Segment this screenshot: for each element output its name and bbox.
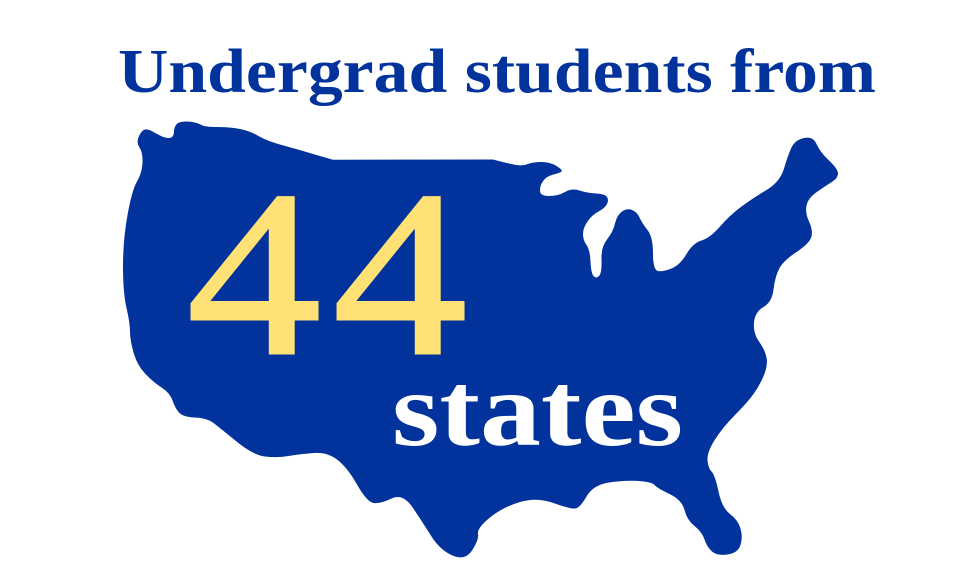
map: United States silhouette (123, 122, 838, 557)
big number: 44: 4 (187, 144, 321, 405)
label: states: states (392, 351, 683, 468)
big number: 44 (187, 144, 467, 405)
big number: 44: 4 (333, 144, 467, 405)
title: Undergrad students from (118, 38, 876, 106)
